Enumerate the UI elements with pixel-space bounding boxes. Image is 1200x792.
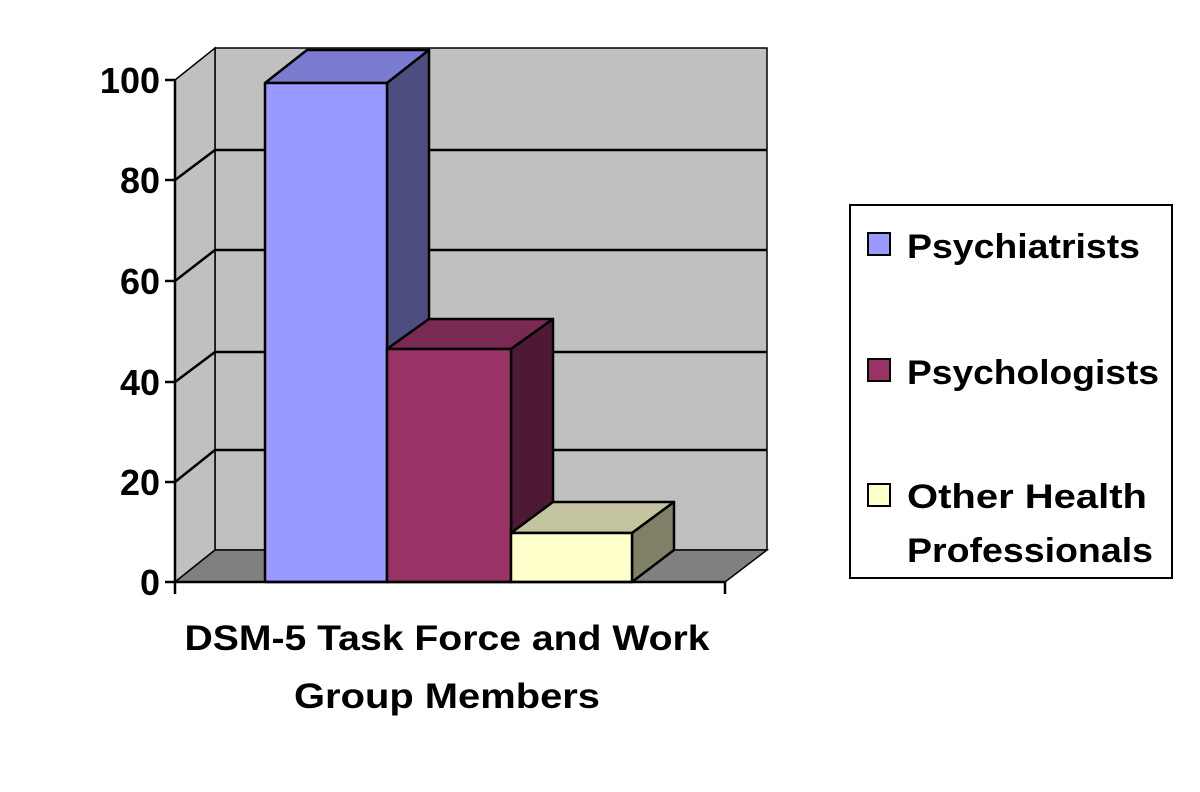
chart area (165, 48, 767, 594)
bar: psychiatrists (265, 50, 429, 582)
y-axis labels: 40 (120, 362, 160, 403)
x-axis title: Group Members (294, 677, 600, 716)
y-axis labels: 80 (120, 160, 160, 201)
bar: psychologists (387, 319, 553, 582)
y-axis labels: 60 (120, 261, 160, 302)
y-axis labels: 100 (100, 60, 160, 101)
y-axis labels (100, 60, 160, 603)
y-axis labels: 20 (120, 462, 160, 503)
back wall (215, 48, 767, 550)
y-axis labels: 0 (140, 562, 160, 603)
legend: Psychologists (907, 354, 1159, 392)
x-axis title: DSM-5 Task Force and Work (184, 619, 710, 658)
legend: Professionals (907, 532, 1153, 570)
bar: other health professionals (511, 502, 674, 582)
left wall (175, 48, 215, 582)
floor (175, 550, 767, 582)
legend: Other Health (907, 478, 1147, 516)
legend: Psychiatrists (907, 228, 1140, 266)
x-axis title (184, 619, 710, 716)
legend (850, 205, 1172, 578)
axes (165, 80, 725, 594)
